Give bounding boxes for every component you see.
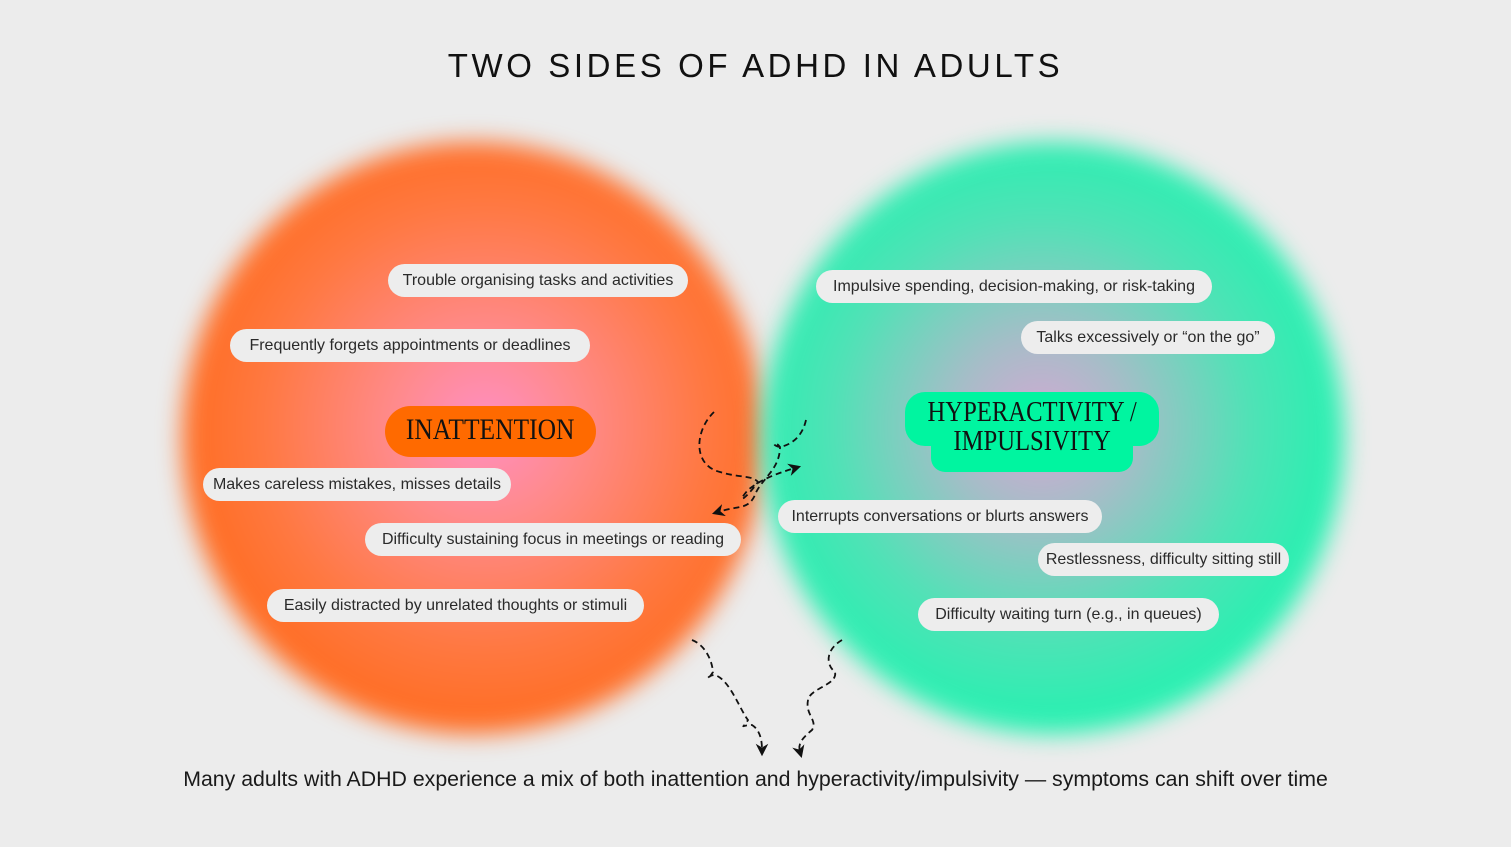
arrow: right to left <box>718 420 806 512</box>
label: hyperactivity / impulsivity: HYPERACTIVITY / <box>927 396 1137 428</box>
pill: restlessness: Restlessness, difficulty sitting still <box>1046 551 1281 568</box>
label: hyperactivity / impulsivity: IMPULSIVITY <box>953 425 1111 457</box>
pill: restlessness <box>1038 543 1289 576</box>
pill: forgets appointments <box>230 329 590 362</box>
label: inattention <box>385 406 596 457</box>
circle: hyperactivity <box>762 142 1344 734</box>
pill: careless mistakes <box>203 468 511 501</box>
pill: easily distracted <box>267 589 644 622</box>
pill: interrupts: Interrupts conversations or blurts answers <box>791 508 1088 525</box>
footer text: Many adults with ADHD experience a mix of both inattention and hyperactivity/impulsivity — symptoms can shift over time <box>183 767 1328 791</box>
pill: interrupts <box>778 500 1102 533</box>
pill: careless mistakes: Makes careless mistakes, misses details <box>213 476 501 493</box>
arrow: down right <box>799 640 842 752</box>
pill: talks excessively <box>1021 321 1275 354</box>
title: TWO SIDES OF ADHD IN ADULTS <box>448 47 1063 84</box>
label: hyperactivity / impulsivity <box>905 392 1159 472</box>
label: inattention: INATTENTION <box>406 413 575 446</box>
pill: easily distracted: Easily distracted by unrelated thoughts or stimuli <box>284 597 627 614</box>
circle: inattention <box>182 142 764 734</box>
pill: waiting turn: Difficulty waiting turn (e.g., in queues) <box>935 606 1202 623</box>
pill: trouble organising <box>388 264 688 297</box>
pill: waiting turn <box>918 598 1219 631</box>
pill: trouble organising: Trouble organising tasks and activities <box>403 272 673 289</box>
pill: sustaining focus: Difficulty sustaining focus in meetings or reading <box>382 531 724 548</box>
pill: impulsive spending <box>816 270 1212 303</box>
arrow: left loop to right <box>699 412 795 499</box>
pill: sustaining focus <box>365 523 741 556</box>
pill: forgets appointments: Frequently forgets appointments or deadlines <box>249 337 571 354</box>
arrow: down left <box>692 640 762 750</box>
pill: impulsive spending: Impulsive spending, decision-making, or risk-taking <box>833 278 1195 295</box>
pill: talks excessively: Talks excessively or “on the go” <box>1036 329 1260 346</box>
